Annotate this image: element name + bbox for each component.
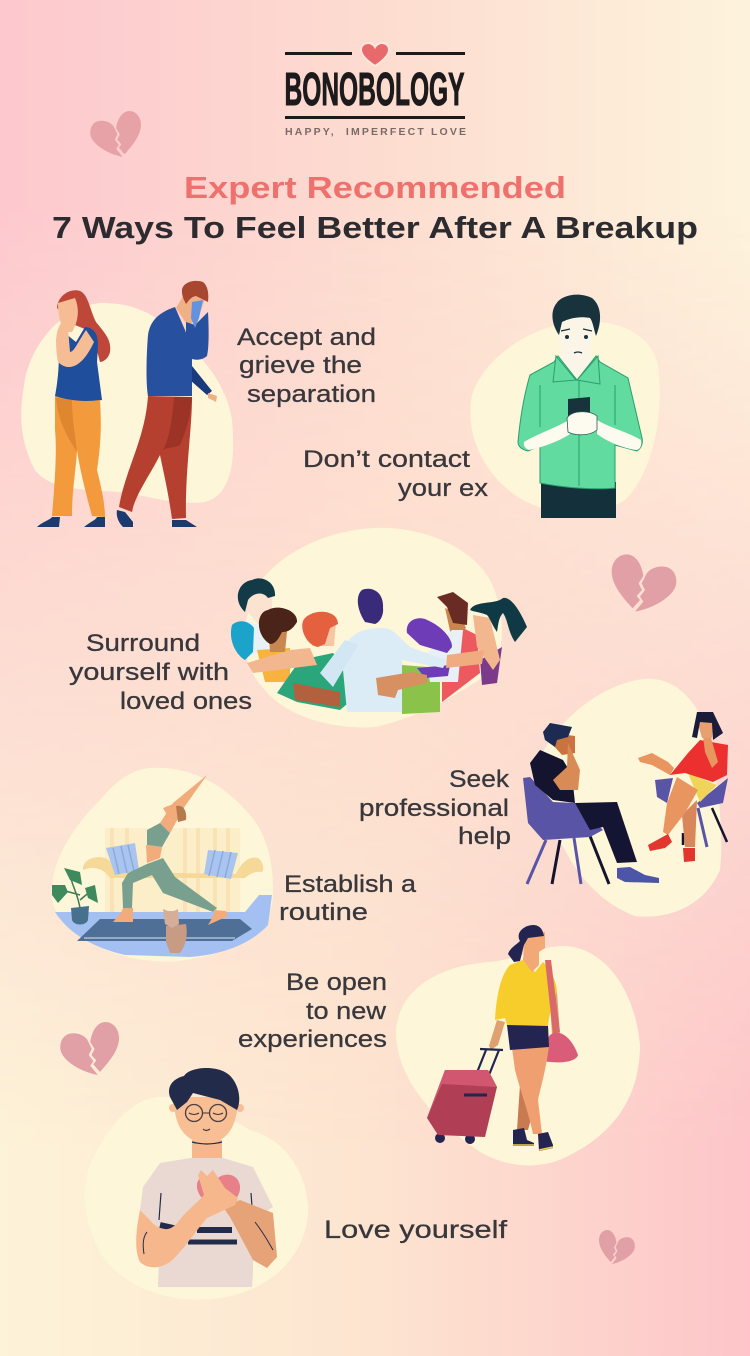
- icon: broken heart lower left: [60, 1022, 119, 1075]
- label: Establish a: [284, 871, 417, 898]
- label: routine: [279, 899, 368, 926]
- label: to new: [306, 998, 387, 1025]
- label: Seek: [449, 766, 510, 793]
- blob: [396, 946, 640, 1165]
- label: [279, 871, 417, 926]
- title: 7 Ways To Feel Better After A Breakup: [52, 210, 698, 245]
- icon: broken heart right: [612, 554, 676, 612]
- blob: [85, 1097, 308, 1300]
- label: experiences: [238, 1026, 387, 1053]
- icon: broken heart bottom right: [599, 1230, 635, 1264]
- illustration: man hugging heart: [136, 1068, 277, 1287]
- panel: don't contact your ex: [303, 295, 660, 518]
- icon: broken heart top left: [90, 111, 141, 157]
- blob: [470, 321, 660, 514]
- label: Don’t contact: [303, 446, 470, 473]
- logo: Bonobology: HAPPY, IMPERFECT LOVE: [285, 126, 466, 138]
- label: grieve the: [239, 352, 362, 379]
- illustration: couple turning away: [37, 281, 217, 527]
- label: Be open: [286, 969, 387, 996]
- panel: seek professional help: [359, 679, 728, 917]
- illustration: yoga at home: [52, 775, 272, 957]
- label: Love yourself: [324, 1216, 507, 1244]
- blob: [537, 679, 721, 917]
- label: [238, 969, 387, 1053]
- logo: Bonobology: [284, 43, 466, 138]
- title: [52, 170, 698, 245]
- icon: logo heart: [361, 43, 389, 66]
- label: [69, 630, 252, 715]
- panel: surround yourself with loved ones: [69, 528, 527, 727]
- blob: [21, 303, 233, 503]
- label: professional: [359, 795, 509, 822]
- label: [359, 766, 511, 850]
- illustration: man with phone: [518, 295, 642, 518]
- panel: be open to new experiences: [238, 925, 640, 1165]
- panel: accept and grieve: [21, 281, 376, 527]
- panel: love yourself: [85, 1068, 507, 1300]
- label: [237, 324, 376, 408]
- blob: [51, 768, 273, 962]
- label: [303, 446, 488, 502]
- logo: Bonobology: BONOBOLOGY: [284, 63, 464, 115]
- illustration: therapy session: [523, 712, 728, 884]
- label: your ex: [398, 475, 488, 502]
- label: separation: [247, 381, 376, 408]
- label: help: [458, 823, 511, 850]
- label: yourself with: [69, 659, 229, 686]
- title: Expert Recommended: [184, 170, 566, 205]
- illustration: group hug: [231, 578, 527, 714]
- label: Surround: [86, 630, 200, 657]
- panel: establish a routine: [51, 768, 417, 962]
- blob: [245, 528, 502, 727]
- label: loved ones: [120, 688, 252, 715]
- illustration: traveller with suitcase: [427, 925, 578, 1151]
- label: Accept and: [237, 324, 376, 351]
